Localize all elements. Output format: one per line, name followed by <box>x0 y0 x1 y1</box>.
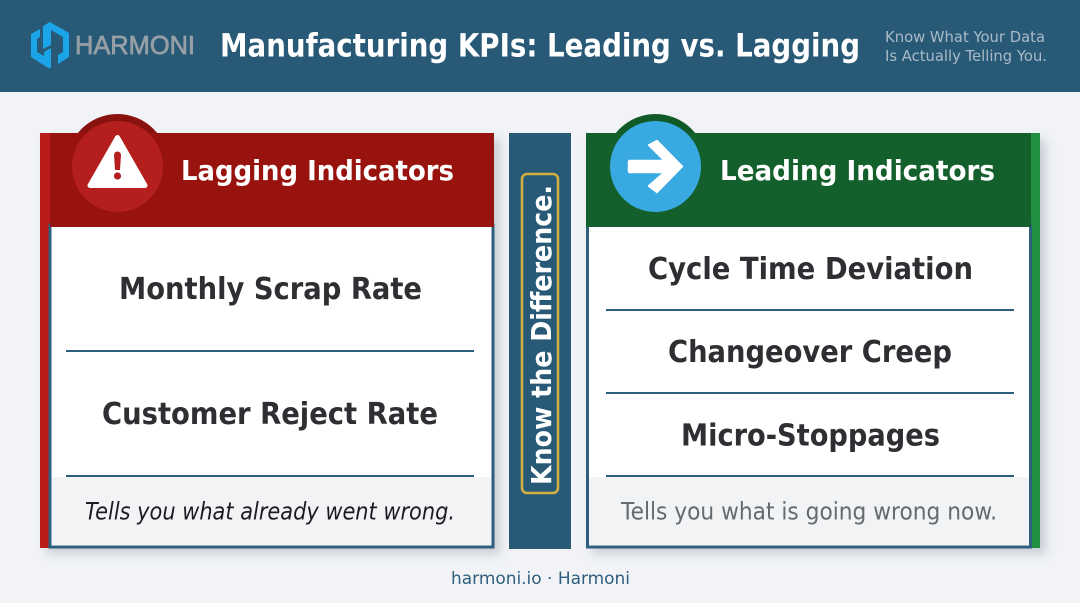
panel body <box>50 225 493 547</box>
badge backing arc <box>66 114 168 216</box>
kpi: changeover creep: Changeover Creep <box>668 335 952 370</box>
gold label frame <box>522 174 558 493</box>
vertical label: Know the Difference. <box>525 185 558 485</box>
footer credit: harmoni.io · Harmoni <box>451 569 630 589</box>
logo <box>31 22 195 68</box>
panel: lagging indicators <box>40 114 500 554</box>
badge backing arc <box>604 114 706 216</box>
kpi: customer reject rate: Customer Reject Rate <box>102 397 438 432</box>
panel body <box>588 225 1030 547</box>
lagging header bar <box>50 133 494 227</box>
kpi: micro-stoppages: Micro-Stoppages <box>681 418 940 454</box>
kpi: cycle time deviation: Cycle Time Deviation <box>648 252 973 287</box>
icon: Harmoni hexagon mark <box>31 22 69 68</box>
logo wordmark: HARMONI <box>75 30 195 60</box>
center column <box>509 133 571 549</box>
lagging heading: Lagging Indicators <box>181 154 454 187</box>
leading caption: Tells you what is going wrong now. <box>620 498 997 526</box>
footer tint <box>52 477 491 545</box>
tagline <box>885 28 1047 65</box>
panel: leading indicators <box>586 114 1046 554</box>
header band <box>0 0 1080 92</box>
green side strip <box>1031 133 1040 548</box>
leading heading: Leading Indicators <box>720 154 995 187</box>
tagline: Is Actually Telling You. <box>885 47 1047 65</box>
icon: right arrow <box>628 140 682 192</box>
title: Manufacturing KPIs: Leading vs. Lagging <box>220 26 860 64</box>
leading header bar <box>586 133 1031 227</box>
badge: warning <box>72 121 163 212</box>
kpi: monthly scrap rate: Monthly Scrap Rate <box>119 272 422 307</box>
red side strip <box>40 133 50 548</box>
footer tint <box>589 477 1029 545</box>
icon: warning triangle <box>90 138 145 186</box>
tagline: Know What Your Data <box>885 28 1045 46</box>
badge: arrow <box>610 121 701 212</box>
lagging caption: Tells you what already went wrong. <box>85 498 455 526</box>
